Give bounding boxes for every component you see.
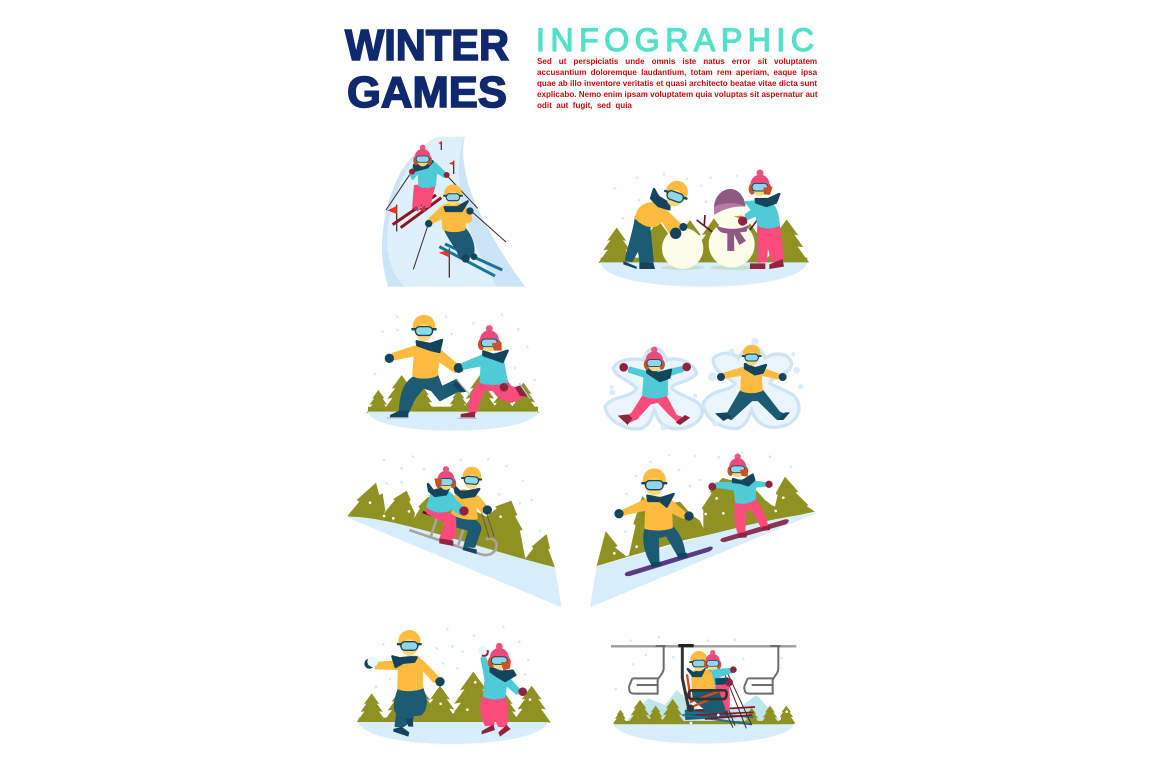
tree snow specks bbox=[369, 501, 502, 520]
left empty chair bbox=[629, 646, 666, 694]
forest bbox=[357, 672, 551, 722]
snowball bbox=[662, 228, 703, 269]
body text block: Sed ut perspiciatis unde omnis iste natus error sit voluptatem bbox=[537, 56, 817, 66]
woman throwing bbox=[478, 643, 527, 737]
maroon snowboard bbox=[720, 519, 789, 542]
man snowboarding bbox=[614, 468, 694, 567]
forest bbox=[366, 375, 539, 413]
man angel bbox=[715, 345, 790, 421]
title: Winter Games: GAMES bbox=[347, 68, 507, 117]
snow dots bbox=[383, 455, 541, 532]
woman on sled bbox=[427, 466, 469, 546]
body text block: accusantium doloremque laudantium, totam rem aperiam, eaque ipsa bbox=[537, 67, 817, 77]
body text block: odit aut fugit, sed quia bbox=[537, 100, 632, 110]
riders bbox=[682, 650, 755, 728]
forest bbox=[613, 699, 796, 724]
man skating bbox=[385, 315, 470, 418]
snowy ground bbox=[600, 262, 807, 287]
body text block: explicabo. Nemo enim ipsam voluptatem quia voluptas sit aspernatur aut bbox=[537, 89, 818, 99]
right empty chair bbox=[744, 646, 780, 694]
snowman bbox=[697, 189, 758, 267]
snow slope bbox=[590, 512, 818, 607]
sled bbox=[409, 512, 497, 555]
forest bbox=[597, 477, 815, 566]
snow dots bbox=[374, 313, 536, 381]
man rolling snowball bbox=[623, 177, 692, 269]
ski slope bbox=[382, 137, 525, 287]
scene: downhill skiing bbox=[382, 137, 525, 287]
title: Winter Games bbox=[345, 21, 509, 117]
title: Winter Games: WINTER bbox=[345, 21, 509, 70]
scene: snow angels bbox=[605, 338, 804, 431]
man on sled bbox=[452, 466, 492, 554]
slalom flags bbox=[387, 141, 454, 278]
snowy ground bbox=[614, 724, 794, 744]
body text block bbox=[537, 56, 818, 110]
distant mountains bbox=[625, 690, 782, 722]
scene: snowboarding bbox=[590, 451, 818, 607]
snow dots bbox=[624, 451, 792, 533]
body text block: quae ab illo inventore veritatis et quasi architecto beatae vitae dicta sunt bbox=[537, 78, 817, 88]
tree snow specks bbox=[439, 681, 531, 715]
snow dots bbox=[614, 636, 783, 690]
scene: chair lift bbox=[611, 636, 796, 744]
purple snowboard bbox=[625, 547, 713, 576]
woman angel bbox=[618, 347, 691, 425]
snow slope bbox=[345, 517, 562, 607]
forest bbox=[347, 483, 555, 567]
woman skating bbox=[457, 325, 530, 418]
woman snowboarding bbox=[708, 453, 773, 538]
scene: building a snowman bbox=[598, 169, 809, 287]
man skier bbox=[413, 184, 506, 276]
scene: snowball fight bbox=[357, 626, 551, 744]
forest bbox=[598, 218, 809, 263]
snow dots bbox=[614, 173, 738, 220]
woman skier bbox=[386, 145, 478, 228]
scene: ice skating bbox=[366, 313, 539, 431]
occupied chair bbox=[678, 646, 727, 712]
tree snow specks bbox=[613, 496, 785, 555]
tree snow specks bbox=[690, 710, 788, 724]
heading: Infographic: INFOGRAPHIC bbox=[536, 22, 814, 58]
ice ground bbox=[367, 412, 538, 431]
woman placing snowman head bbox=[738, 169, 784, 269]
snow clumps bbox=[609, 338, 804, 431]
man throwing bbox=[364, 630, 445, 737]
cable bbox=[611, 643, 796, 650]
snowy ground bbox=[358, 722, 548, 744]
snow angel imprints bbox=[605, 346, 799, 429]
snow dots bbox=[375, 626, 530, 688]
scene: sledding bbox=[345, 455, 562, 607]
